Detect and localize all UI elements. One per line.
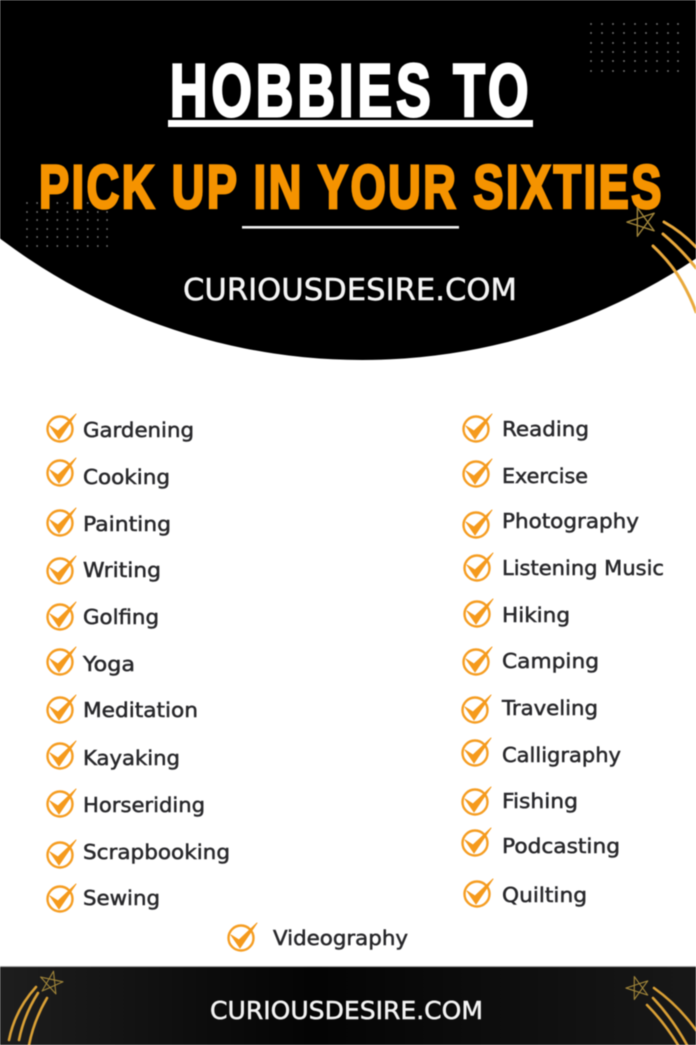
item: Gardening: Gardening — [83, 418, 194, 442]
subtitle: Pick up in your sixties: PICK UP IN YOUR SIXTIES — [39, 153, 661, 222]
item: Quilting: Quilting — [502, 883, 587, 907]
item: Hiking: Hiking — [502, 603, 570, 627]
item: Fishing: Fishing — [502, 789, 578, 813]
item: Listening Music — [464, 553, 664, 580]
item: Yoga: Yoga — [82, 652, 135, 676]
item: Painting — [48, 508, 171, 536]
divider line under subtitle — [242, 226, 459, 229]
item: Videography: Videography — [273, 926, 408, 950]
item: Sewing: Sewing — [83, 886, 160, 910]
item: Painting: Painting — [83, 512, 171, 536]
item: Camping: Camping — [502, 649, 599, 673]
item: Writing — [48, 556, 161, 584]
item: Sewing — [48, 884, 160, 912]
item: Fishing — [462, 787, 578, 814]
item: Yoga — [48, 647, 135, 676]
title: Hobbies to: HOBBIES TO — [170, 49, 528, 132]
icon: shooting star bottom right — [623, 973, 696, 1045]
item: Golfing — [48, 602, 159, 630]
item: Reading — [464, 414, 589, 442]
item: Writing: Writing — [83, 558, 161, 582]
website label: header: CURIOUSDESIRE.COM — [183, 273, 517, 308]
item: Cooking — [48, 458, 170, 489]
item: Exercise: Exercise — [502, 464, 588, 488]
item: Videography — [228, 923, 408, 950]
item: Exercise — [464, 459, 588, 488]
dot grid: top right — [590, 23, 679, 72]
icon: shooting star bottom left — [9, 969, 65, 1045]
item: Photography: Photography — [502, 509, 639, 533]
item: Scrapbooking: Scrapbooking — [83, 840, 230, 864]
list: left column — [48, 414, 230, 912]
item: Podcasting — [462, 828, 620, 858]
list: right column — [462, 414, 664, 907]
item: Traveling: Traveling — [501, 696, 598, 720]
item: Quilting — [464, 879, 587, 907]
item: Meditation — [48, 695, 198, 722]
item: Horseriding: Horseriding — [83, 793, 205, 817]
item: Scrapbooking — [48, 840, 230, 868]
item: Cooking: Cooking — [83, 465, 170, 489]
item: Meditation: Meditation — [83, 698, 198, 722]
item: Photography — [464, 509, 639, 538]
header: black curved panel — [0, 0, 696, 360]
item: Gardening — [48, 414, 194, 442]
item: Traveling — [462, 695, 598, 722]
item: Calligraphy: Calligraphy — [502, 743, 621, 767]
item: Camping — [464, 647, 599, 674]
dot grid: left — [26, 202, 108, 247]
item: Listening Music: Listening Music — [502, 556, 664, 580]
item: Kayaking — [48, 741, 180, 770]
item: Calligraphy — [462, 738, 621, 767]
footer bar — [0, 966, 696, 1045]
item: Reading: Reading — [502, 417, 589, 441]
website label: footer: CURIOUSDESIRE.COM — [210, 996, 483, 1025]
item: Kayaking: Kayaking — [83, 746, 180, 770]
icon: shooting star top right — [624, 203, 696, 312]
item: Horseriding — [48, 789, 205, 817]
item: Podcasting: Podcasting — [502, 834, 620, 858]
item: Golfing: Golfing — [83, 605, 159, 629]
item: Hiking — [464, 599, 570, 627]
